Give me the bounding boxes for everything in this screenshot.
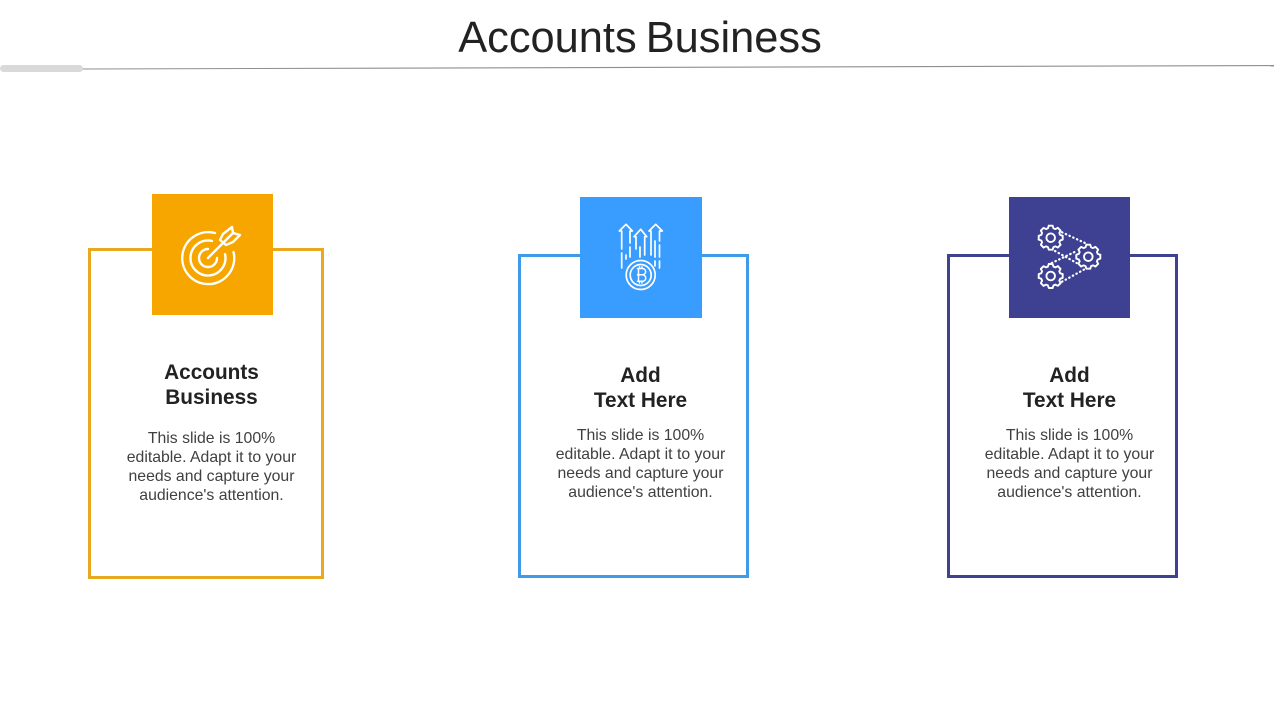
heading: Business	[165, 386, 258, 409]
heading: Text Here	[594, 389, 687, 412]
icon: target	[181, 226, 242, 286]
heading: Add	[1049, 364, 1090, 387]
heading: Accounts	[164, 361, 259, 384]
body text: This slide is 100%	[148, 430, 275, 447]
body text: editable. Adapt it to your	[985, 446, 1154, 463]
panel frame	[518, 254, 749, 578]
body text	[556, 427, 725, 501]
icon tile: bitcoin arrows	[580, 197, 702, 318]
heading	[164, 361, 259, 409]
icon tile: target with arrow	[152, 194, 273, 315]
body text: needs and capture your	[558, 465, 723, 482]
panel: add text here (blue)	[518, 197, 749, 578]
body text: This slide is 100%	[577, 427, 704, 444]
icon: three gears joined by dotted lines	[1038, 224, 1102, 289]
body text	[985, 427, 1154, 501]
panel frame	[947, 254, 1178, 578]
body text: editable. Adapt it to your	[127, 449, 296, 466]
heading: Add	[620, 364, 661, 387]
body text: needs and capture your	[128, 468, 294, 485]
body text: audience's attention.	[568, 484, 713, 501]
heading	[1023, 364, 1116, 412]
body text: audience's attention.	[997, 484, 1142, 501]
panel: add text here (navy)	[947, 197, 1178, 578]
heading: Text Here	[1023, 389, 1116, 412]
body text: audience's attention.	[139, 487, 284, 504]
title rule	[0, 65, 1274, 72]
title: Accounts Business	[458, 14, 822, 62]
body text: needs and capture your	[986, 465, 1152, 482]
icon tile: linked gears	[1009, 197, 1130, 318]
body text: This slide is 100%	[1006, 427, 1133, 444]
body text: editable. Adapt it to your	[556, 446, 725, 463]
heading	[594, 364, 687, 412]
icon: bitcoin with rising arrows	[618, 223, 664, 290]
body text	[127, 430, 296, 504]
panel: accounts business	[88, 194, 324, 579]
panel frame	[88, 248, 324, 579]
